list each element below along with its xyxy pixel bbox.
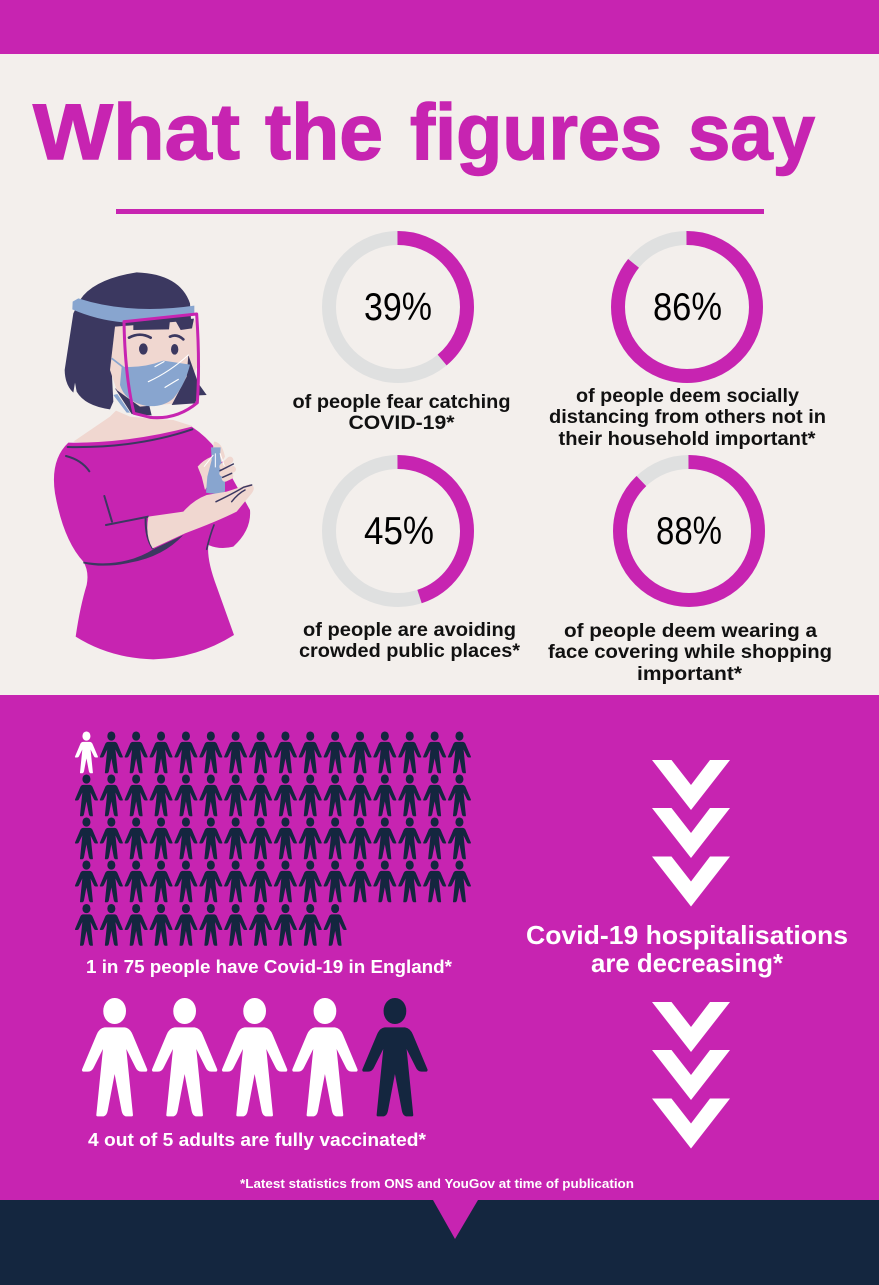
caption: 88%: face covering while shopping — [548, 642, 832, 663]
pointer triangle — [433, 1200, 478, 1239]
chevrons: lower group — [652, 1002, 730, 1148]
pictogram: 4 out of 5 adults — [82, 998, 428, 1116]
caption: 86%: their household important* — [558, 429, 816, 450]
pictogram: 1 in 75 people — [75, 732, 471, 946]
caption: 1 in 75: 1 in 75 people have Covid-19 in England* — [86, 957, 452, 977]
caption: 45%: crowded public places* — [299, 641, 521, 662]
magenta statistics panel — [0, 695, 879, 1200]
caption: 45%: of people are avoiding — [303, 620, 516, 641]
caption: 45% — [299, 620, 521, 662]
donut: 39%: 39% — [364, 286, 432, 329]
chevrons: upper group — [652, 760, 730, 906]
donut: 88% — [620, 462, 758, 600]
title: the — [265, 87, 383, 176]
donut: 88%: 88% — [656, 510, 722, 553]
caption: 39%: of people fear catching — [292, 392, 510, 413]
donut: 45% — [329, 462, 467, 600]
bottom banner — [0, 1200, 879, 1285]
caption: 4 out of 5: 4 out of 5 adults are fully vaccinated* — [88, 1130, 426, 1150]
title: say — [688, 87, 815, 176]
hospitalisations statement — [526, 920, 848, 978]
title: figures — [410, 87, 662, 176]
donut: 39% — [329, 238, 467, 376]
title underline — [116, 209, 764, 214]
donut: 86% — [618, 238, 756, 376]
title — [33, 87, 815, 176]
top banner — [0, 0, 879, 54]
top — [54, 427, 250, 659]
caption: 86%: distancing from others not in — [549, 407, 826, 428]
hospitalisations statement: Covid-19 hospitalisations — [526, 920, 848, 950]
hand and bottle — [198, 442, 225, 490]
neck and shoulders — [73, 411, 192, 447]
caption: 88%: important* — [637, 664, 743, 685]
title: What — [33, 87, 240, 176]
donut: 86%: 86% — [653, 286, 722, 329]
footnote: *Latest statistics from ONS and YouGov at time of publication — [240, 1176, 634, 1191]
caption: 88% — [548, 621, 832, 685]
caption: 88%: of people deem wearing a — [564, 621, 817, 642]
illustration: woman with face shield and sanitiser — [54, 272, 254, 659]
caption: 86% — [549, 386, 826, 450]
hospitalisations statement: are decreasing* — [591, 948, 784, 978]
caption: 86%: of people deem socially — [576, 386, 799, 407]
caption: 39% — [292, 392, 510, 434]
head — [65, 272, 207, 418]
caption: 39%: COVID-19* — [348, 413, 455, 434]
donut: 45%: 45% — [364, 510, 434, 553]
